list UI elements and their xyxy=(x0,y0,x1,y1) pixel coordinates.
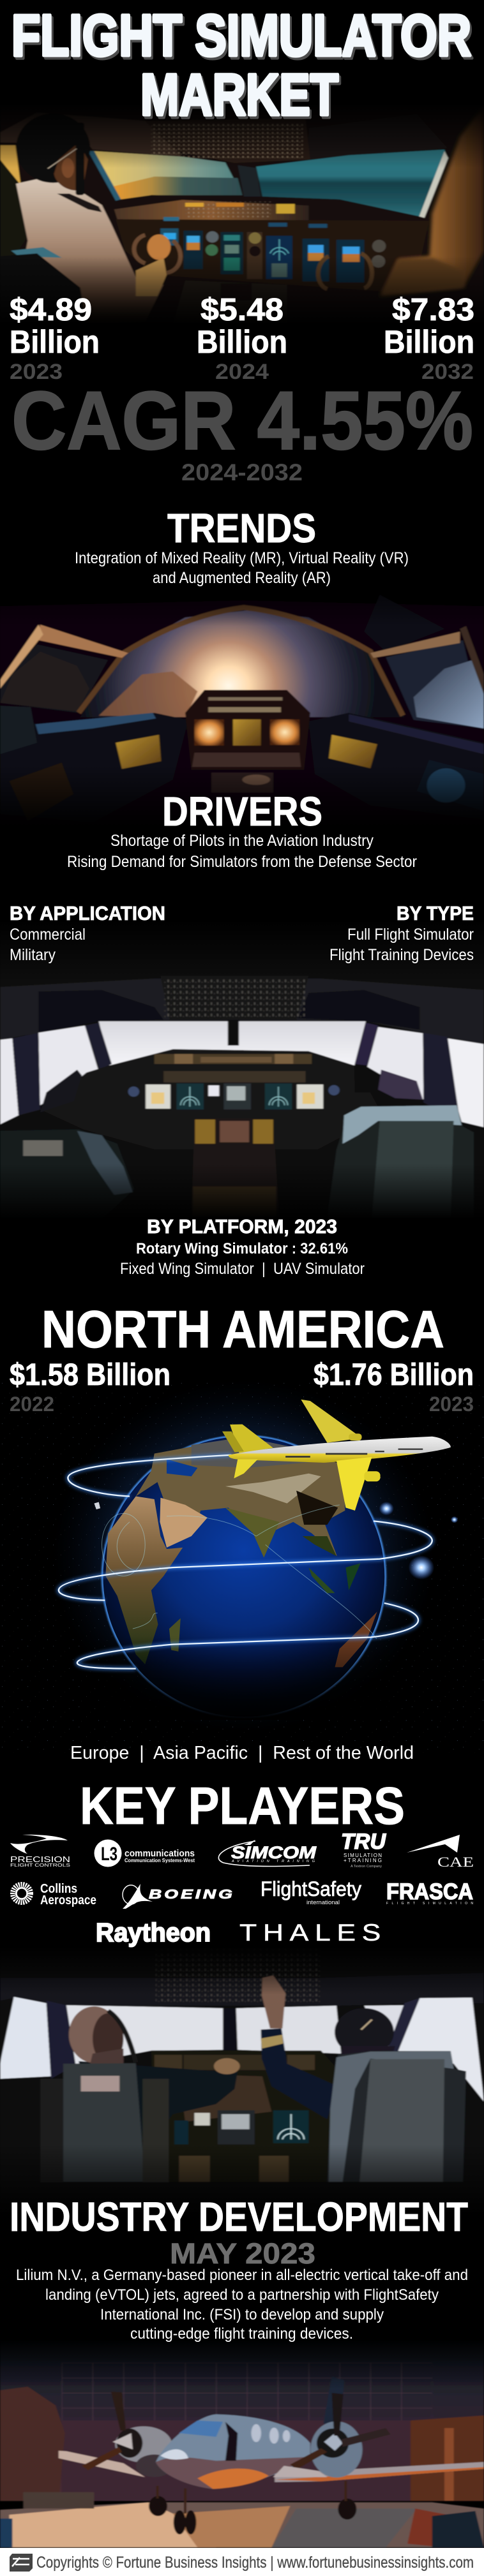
drivers text: Shortage of Pilots in the Aviation Industry xyxy=(110,832,374,850)
logo: L3 Communications: Communication Systems-West xyxy=(125,1858,195,1863)
logo: TRU Simulation + Training xyxy=(341,1830,386,1869)
segment: by application xyxy=(10,902,165,964)
heading: drivers: DRIVERS xyxy=(162,788,322,834)
logo: L3 Communications: communications xyxy=(125,1848,195,1859)
logo: Precision Flight Controls: FLIGHT CONTROLS xyxy=(10,1863,70,1868)
segment: by platform: Fixed Wing Simulator | UAV Simulator xyxy=(120,1260,365,1278)
value 2022: $1.58 Billion xyxy=(10,1358,170,1392)
heading: trends xyxy=(75,505,409,587)
regional values xyxy=(10,1358,474,1416)
trends text: and Augmented Reality (AR) xyxy=(153,569,331,587)
image: two pilots in cockpit xyxy=(0,1946,484,2217)
logo: SimCom xyxy=(218,1840,317,1866)
date: MAY 2023 xyxy=(170,2237,315,2270)
value 2023 xyxy=(314,1358,474,1416)
logo: SimCom: AVIATION TRAINING xyxy=(231,1860,315,1863)
segment: by platform: BY PLATFORM, 2023 xyxy=(147,1215,337,1238)
logo: CAE: CAE xyxy=(437,1854,474,1870)
logo: SimCom: SIMCOM xyxy=(231,1843,317,1862)
industry development text xyxy=(16,2267,468,2343)
stat: 2024 market size: Billion xyxy=(197,324,287,360)
image: spaceship cockpit xyxy=(0,569,484,827)
key player logos xyxy=(10,1830,474,1947)
value 2023: 2023 xyxy=(429,1393,474,1416)
stat: 2032 market size: $7.83 xyxy=(392,293,474,327)
segment: by platform: Rotary Wing Simulator : 32.61% xyxy=(136,1240,348,1257)
logo: FlightSafety International: FlightSafety xyxy=(261,1877,361,1900)
stat: 2023 market size: 2023 xyxy=(10,360,63,384)
logo: TRU Simulation + Training: +TRAINING xyxy=(344,1858,382,1863)
stat: 2023 market size: $4.89 xyxy=(10,293,92,327)
orbit rings xyxy=(59,1455,432,1669)
value 2022 xyxy=(10,1358,170,1416)
logo: TRU Simulation + Training: TRU xyxy=(341,1830,386,1854)
segment: by type xyxy=(329,902,474,964)
other regions: Europe | Asia Pacific | Rest of the World xyxy=(70,1743,414,1763)
logo: Thales: THALES xyxy=(239,1920,387,1946)
footer xyxy=(0,2548,484,2576)
logo: CAE xyxy=(407,1835,474,1870)
image: airliner cockpit with empty seats xyxy=(0,919,484,1219)
stat: 2032 market size: 2032 xyxy=(421,360,474,384)
value 2022: 2022 xyxy=(10,1393,54,1416)
drivers text xyxy=(67,832,417,871)
logo: FlightSafety International: international xyxy=(306,1899,340,1906)
logo: Raytheon: Raytheon xyxy=(96,1918,211,1947)
industry development text: landing (eVTOL) jets, agreed to a partnership with FlightSafety xyxy=(45,2286,439,2304)
stat: 2023 market size: Billion xyxy=(10,324,100,360)
heading: drivers xyxy=(67,788,417,871)
logo: TRU Simulation + Training: SIMULATION xyxy=(344,1853,382,1858)
CAGR callout: 2024-2032 xyxy=(181,459,303,485)
segment: by application: Military xyxy=(10,946,56,964)
stat: 2032 market size: Billion xyxy=(384,324,474,360)
image: hero cockpit with pilot xyxy=(0,103,484,366)
segment: by application: BY APPLICATION xyxy=(10,902,165,924)
logo: Collins Aerospace: Aerospace xyxy=(40,1893,96,1907)
logo: TRU Simulation + Training: A Textron Company xyxy=(351,1865,382,1869)
stat: 2032 market size xyxy=(384,293,474,384)
logo: L3 Communications: L3 xyxy=(101,1844,117,1865)
trends text: Integration of Mixed Reality (MR), Virtual Reality (VR) xyxy=(75,549,409,567)
logo: Collins Aerospace: Collins xyxy=(40,1882,77,1896)
title: MARKET xyxy=(140,63,338,128)
heading: industry development xyxy=(10,2194,468,2270)
stat: 2024 market size xyxy=(197,293,287,384)
heading: north america: NORTH AMERICA xyxy=(42,1299,444,1359)
logo: Collins Aerospace xyxy=(13,1882,96,1907)
logo: Boeing xyxy=(123,1884,235,1909)
segment: by type: BY TYPE xyxy=(397,902,474,924)
drivers text: Rising Demand for Simulators from the Defense Sector xyxy=(67,853,417,871)
globe xyxy=(99,1437,389,1720)
heading: key players: KEY PLAYERS xyxy=(80,1776,405,1835)
bright stars xyxy=(94,1502,458,1580)
logo: Frasca: FRASCA xyxy=(386,1879,473,1904)
logo: Precision Flight Controls xyxy=(10,1835,70,1868)
airplane xyxy=(222,1400,451,1511)
stat: 2024 market size: $5.48 xyxy=(200,293,284,327)
logo: Precision Flight Controls: PRECISION xyxy=(10,1854,70,1864)
image: globe with airplane xyxy=(0,1379,484,1752)
logo: L3 Communications xyxy=(95,1840,195,1867)
logo: Boeing: BOEING xyxy=(149,1888,235,1902)
stat: 2024 market size: 2024 xyxy=(215,360,269,384)
title xyxy=(11,3,471,128)
industry development text: International Inc. (FSI) to develop and supply xyxy=(100,2306,384,2323)
stat: 2023 market size xyxy=(10,293,100,384)
image: hangar with propeller aircraft xyxy=(0,2339,484,2547)
heading: trends: TRENDS xyxy=(167,505,316,551)
logo: Frasca: FLIGHT SIMULATION xyxy=(386,1902,473,1906)
segment: by application: Commercial xyxy=(10,926,86,944)
industry development text: cutting-edge flight training devices. xyxy=(130,2325,353,2343)
trends text xyxy=(75,549,409,587)
segment: by platform xyxy=(120,1215,365,1278)
icon: Fortune Business Insights logo xyxy=(10,2554,33,2572)
